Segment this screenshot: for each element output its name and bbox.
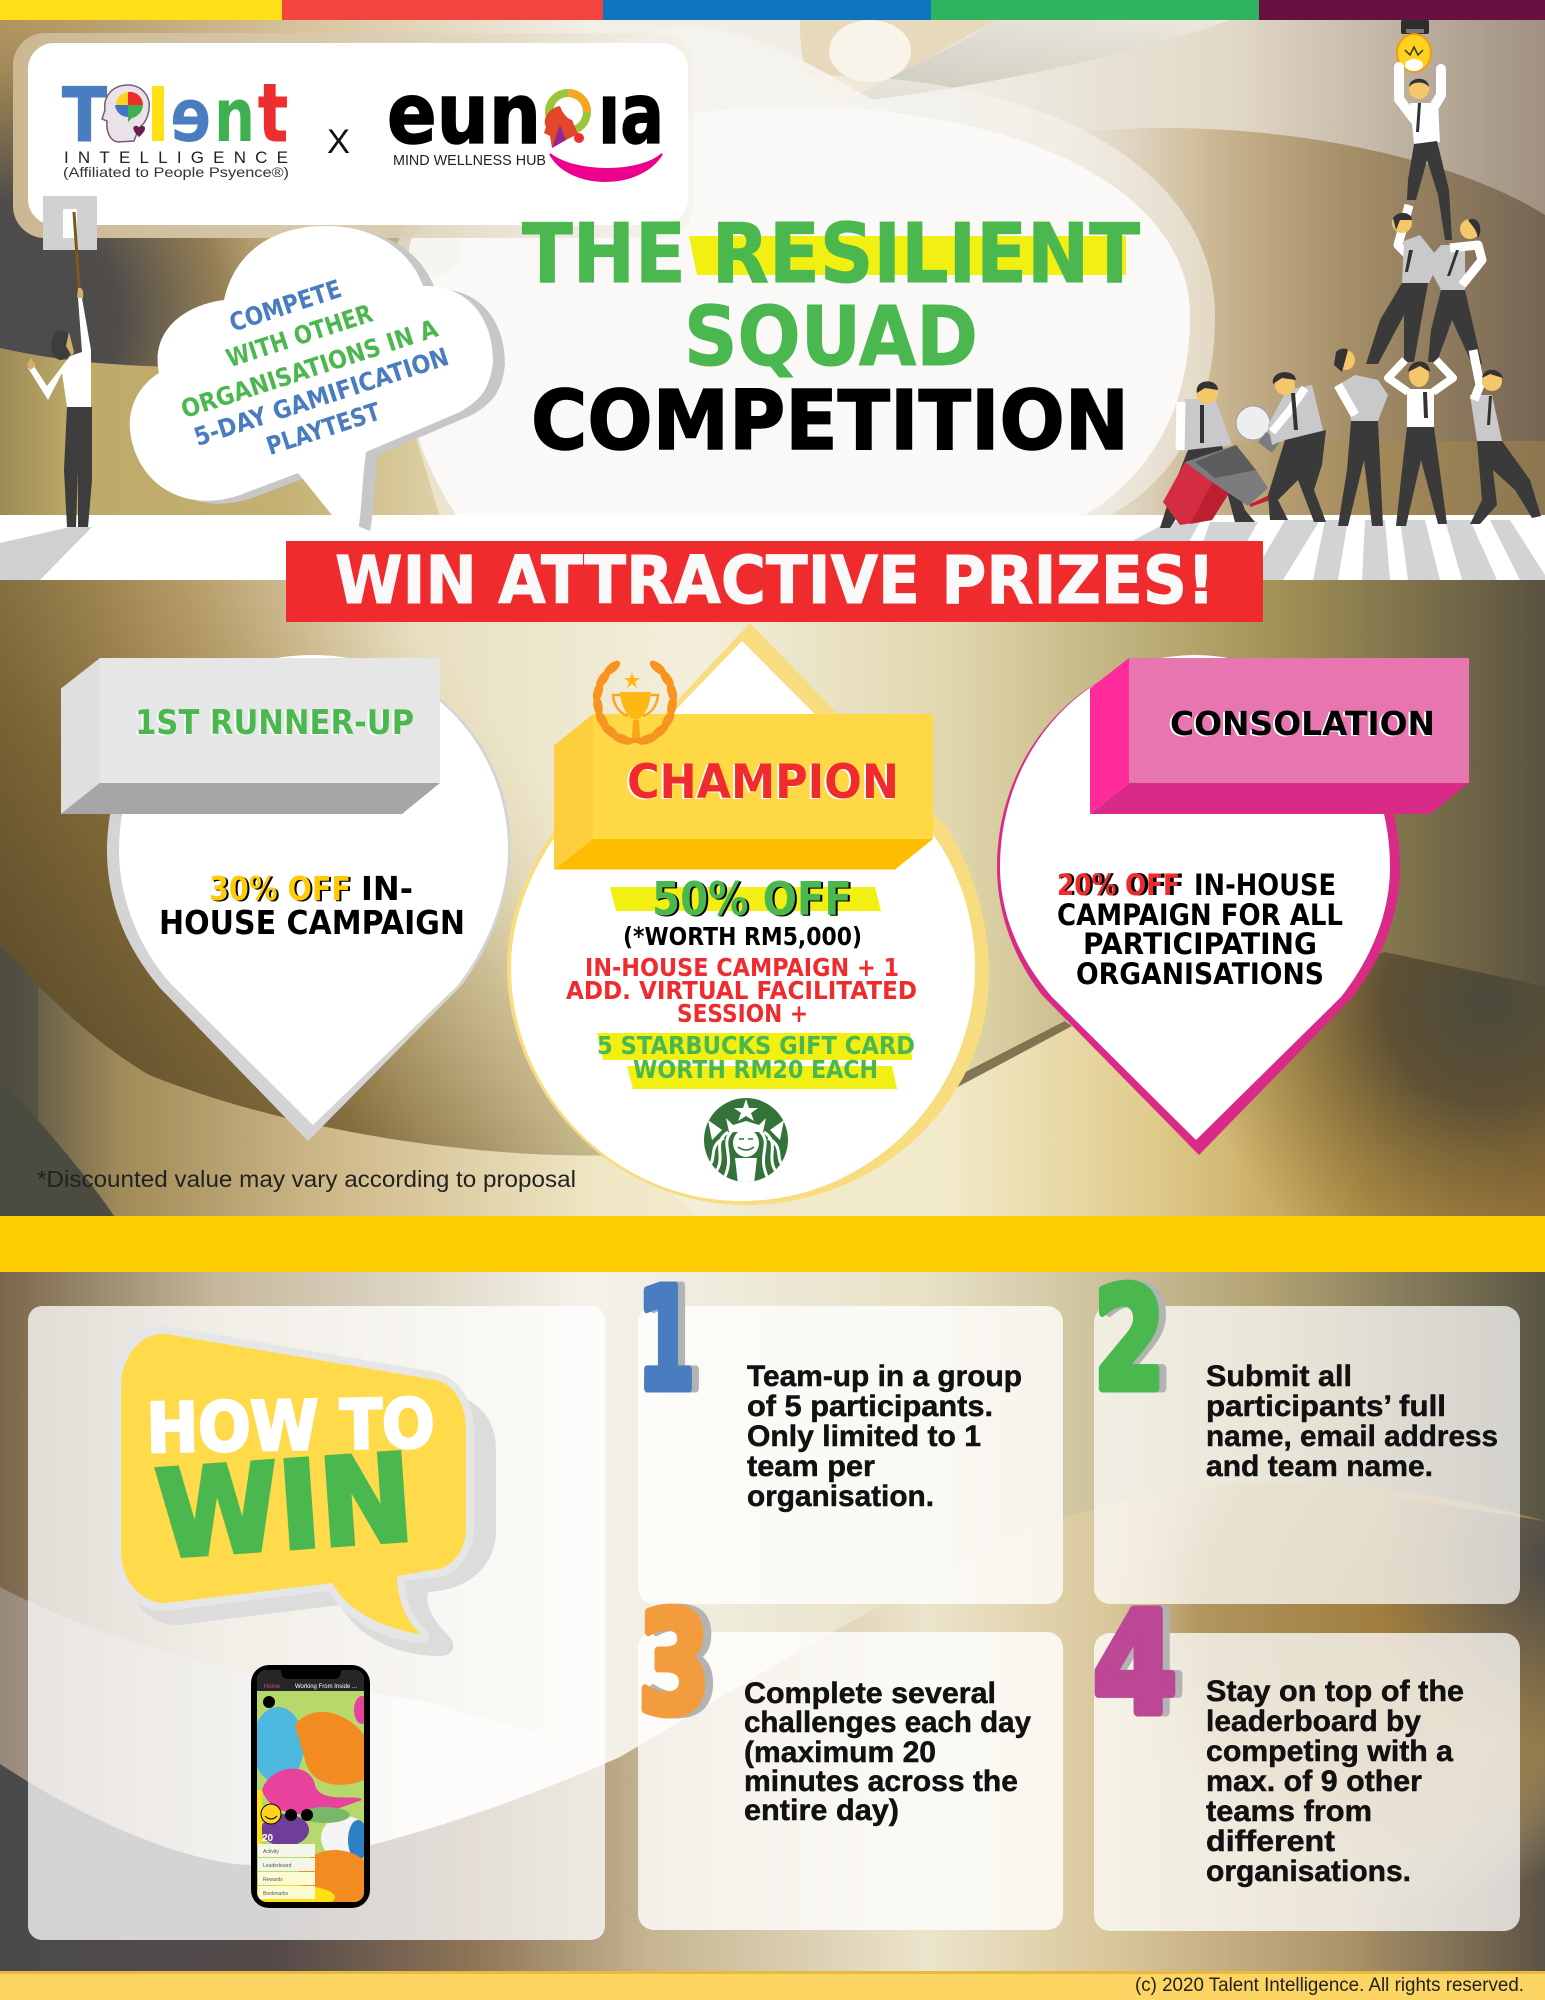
consolation prize text: IN-HOUSE — [1194, 868, 1336, 902]
background: floor strip — [0, 515, 1545, 580]
step 2 text: participants’ full — [1206, 1390, 1446, 1423]
champion prize text: ADD. VIRTUAL FACILITATED — [566, 976, 917, 1005]
step 1: 1 — [637, 1259, 695, 1422]
cloud text: COMPETE — [226, 274, 345, 338]
champion 3D label block: CHAMPION — [627, 755, 899, 810]
icon: Starbucks logo — [703, 1098, 789, 1184]
title: SQUAD — [684, 290, 978, 385]
cloud text: 5-DAY GAMIFICATION — [190, 342, 452, 452]
consolation prize text — [1057, 868, 1343, 991]
footer band with copyright — [0, 1971, 1545, 2000]
champion prize text — [566, 872, 917, 1089]
step 4 text: different — [1206, 1825, 1335, 1858]
phone mockup: Rewards — [263, 1877, 283, 1883]
step 2: 2 — [1094, 1259, 1165, 1422]
consolation 3D label block: CONSOLATION — [1170, 704, 1435, 743]
phone mockup: 20 — [262, 1833, 274, 1844]
phone mockup: Working From Inside ... — [295, 1684, 357, 1690]
step 4 text — [1206, 1675, 1464, 1888]
cloud text: WITH OTHER — [223, 299, 376, 373]
runner-up prize text: 30% OFF — [209, 869, 351, 908]
runner-up prize text: IN- — [361, 869, 413, 908]
logo: Talent Intelligence — [62, 67, 289, 180]
runner-up 3D label block: 1ST RUNNER-UP — [135, 703, 414, 743]
illustration: team reaching for light bulb — [1160, 20, 1541, 528]
consolation prize text: ORGANISATIONS — [1076, 957, 1324, 991]
cloud text — [177, 274, 452, 461]
speech cloud — [130, 226, 505, 531]
phone mockup — [245, 1665, 373, 1910]
panel: champion — [507, 623, 989, 1205]
step 2 — [1094, 1259, 1520, 1604]
figure: crouching men with box — [1160, 372, 1326, 528]
champion prize text: IN-HOUSE CAMPAIGN + 1 — [585, 953, 899, 982]
cross mark between logos: X — [327, 123, 350, 161]
logo: Talent Intelligence: n — [214, 73, 255, 159]
panel: how to win — [28, 1306, 605, 1940]
light switch and pole — [43, 196, 97, 287]
runner-up 3D label block — [61, 658, 440, 814]
step 4 text: Stay on top of the — [1206, 1675, 1464, 1708]
step 4 text: max. of 9 other — [1206, 1765, 1422, 1798]
consolation prize text: PARTICIPATING — [1083, 927, 1317, 961]
title — [522, 207, 1140, 469]
step 1 text — [747, 1360, 1022, 1513]
panel: 1st runner-up — [61, 655, 511, 1141]
title: THE RESILIENT — [522, 207, 1140, 302]
phone mockup: Leaderboard — [263, 1863, 292, 1869]
phone mockup: Bookmarks — [263, 1891, 289, 1897]
step 3 text: challenges each day — [744, 1706, 1031, 1739]
step 4 text: leaderboard by — [1206, 1705, 1421, 1738]
step 1 text: Only limited to 1 — [747, 1420, 981, 1453]
background: white apple shape behind title — [380, 27, 1215, 518]
banner: win attractive prizes: WIN ATTRACTIVE PRIZES! — [335, 542, 1215, 619]
background: how-to-win section — [0, 1272, 1545, 1972]
phone mockup: Activity — [263, 1849, 279, 1855]
step 3: 3 — [646, 1583, 718, 1746]
logo: Talent Intelligence: e — [170, 73, 211, 159]
step 2: 2 — [1101, 1259, 1172, 1422]
cloud text: ORGANISATIONS IN A — [177, 314, 442, 424]
logo: Talent Intelligence: T — [62, 71, 107, 159]
background: prize section — [0, 580, 1545, 1216]
consolation prize text: 20% OFF — [1059, 868, 1184, 902]
logo: Talent Intelligence: INTELLIGENCE — [64, 148, 288, 167]
step 4 text: competing with a — [1206, 1735, 1453, 1768]
champion prize text: 50% OFF — [652, 872, 852, 926]
step 3 text: (maximum 20 — [744, 1736, 936, 1769]
step 1 text: of 5 participants. — [747, 1390, 993, 1423]
footnote: *Discounted value may vary according to proposal — [37, 1166, 576, 1192]
figure: man with pole — [27, 288, 92, 527]
speech bubble heading — [113, 1326, 496, 1656]
logo: Eunoia — [387, 65, 664, 181]
champion prize text: SESSION + — [677, 999, 808, 1028]
runner-up prize text: HOUSE CAMPAIGN — [159, 903, 465, 942]
figure: bottom pyramid row — [1334, 349, 1541, 526]
title: COMPETITION — [531, 374, 1129, 469]
logo card — [13, 33, 693, 238]
step 4: 4 — [1093, 1583, 1177, 1746]
logo: Eunoia: MIND WELLNESS HUB — [393, 152, 546, 169]
champion prize text: 5 STARBUCKS GIFT CARD — [597, 1031, 915, 1060]
consolation 3D label block — [1090, 658, 1469, 814]
step 2 text: Submit all — [1206, 1360, 1352, 1393]
cloud text: PLAYTEST — [263, 397, 384, 461]
speech bubble heading: HOW TO — [146, 1385, 435, 1469]
step 4 — [1093, 1583, 1520, 1931]
champion 3D label block — [554, 714, 933, 870]
yellow divider band — [0, 1216, 1545, 1272]
step 1 text: organisation. — [747, 1480, 934, 1513]
step 3 text: Complete several — [744, 1677, 996, 1710]
figure: top climber — [1399, 67, 1452, 240]
logo: Eunoia: eun — [387, 65, 541, 163]
top colour stripes — [0, 0, 1545, 20]
champion prize text: WORTH RM20 EACH — [633, 1055, 878, 1084]
phone mockup: Home — [264, 1684, 281, 1690]
step 2 text: name, email address — [1206, 1420, 1498, 1453]
consolation prize text: 20% OFF — [1057, 868, 1180, 902]
background: top section — [0, 20, 1545, 516]
panel: consolation — [997, 655, 1469, 1155]
step 1: 1 — [644, 1259, 702, 1422]
footer band with copyright: (c) 2020 Talent Intelligence. All rights reserved. — [1135, 1975, 1524, 1996]
step 2 text — [1206, 1360, 1498, 1483]
icon: trophy with laurel — [591, 658, 679, 747]
step 3 — [638, 1583, 1063, 1930]
logo: Talent Intelligence: (Affiliated to People Psyence®) — [63, 164, 289, 180]
step 2 text: and team name. — [1206, 1450, 1433, 1483]
logo: Eunoia: ıa — [598, 65, 664, 163]
speech bubble heading: WIN — [152, 1429, 417, 1586]
step 3 text: minutes across the — [744, 1765, 1018, 1798]
step 1 text: Team-up in a group — [747, 1360, 1022, 1393]
step 4 text: organisations. — [1206, 1855, 1411, 1888]
step 1 — [637, 1259, 1063, 1604]
step 1 text: team per — [747, 1450, 875, 1483]
figure: middle climbers — [1366, 205, 1482, 364]
step 3 text: entire day) — [744, 1794, 899, 1827]
step 3: 3 — [638, 1583, 710, 1746]
light bulb and socket — [1397, 20, 1431, 72]
step 4 text: teams from — [1206, 1795, 1372, 1828]
runner-up prize text — [159, 869, 465, 942]
consolation prize text: CAMPAIGN FOR ALL — [1057, 898, 1343, 932]
step 3 text — [744, 1677, 1031, 1827]
logo: Talent Intelligence: t — [258, 67, 288, 160]
step 4: 4 — [1100, 1583, 1184, 1746]
champion prize text: (*WORTH RM5,000) — [623, 922, 862, 951]
